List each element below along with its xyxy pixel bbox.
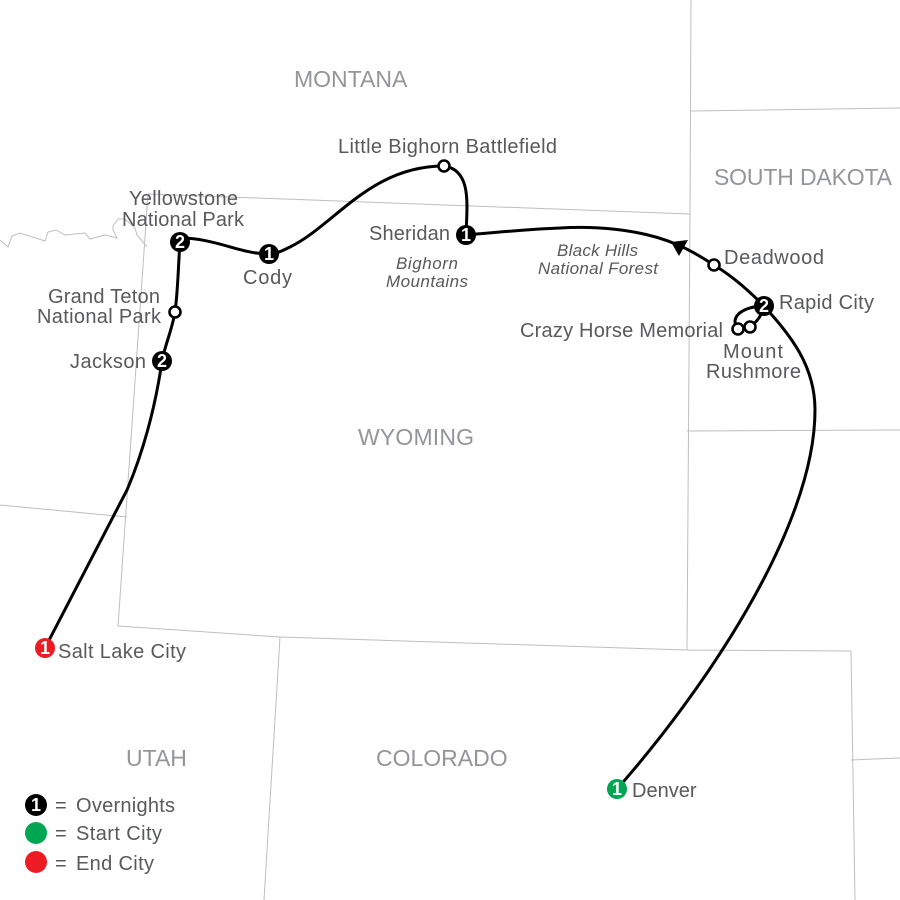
stop: Rapid City: 2 — [759, 296, 769, 316]
state labels: MONTANA — [294, 66, 408, 92]
stop: Mount Rushmore: Mount — [723, 341, 783, 363]
stop: Jackson: 2 — [157, 351, 167, 371]
stop: Grand Teton: Grand Teton — [48, 286, 160, 308]
legend: Overnights — [76, 795, 175, 817]
stop: Salt Lake City: Salt Lake City — [58, 641, 186, 663]
tour route — [45, 166, 815, 789]
stop: Cody — [243, 244, 292, 289]
stop: Yellowstone: National Park — [122, 209, 245, 231]
forest label: National Forest — [538, 259, 659, 278]
state labels: SOUTH DAKOTA — [714, 164, 893, 190]
legend: = — [55, 823, 67, 845]
stop: Mount Rushmore — [706, 322, 801, 383]
direction arrow — [671, 240, 688, 256]
stop: Little Bighorn Battlefield: Little Bighorn Battlefield — [338, 136, 557, 158]
stop: Sheridan: 1 — [461, 225, 471, 245]
mountains label: Mountains — [386, 272, 468, 291]
stop: Denver — [607, 779, 697, 802]
stop: Yellowstone: Yellowstone — [129, 188, 238, 210]
stop: Cody: Cody — [243, 267, 292, 289]
stop: Yellowstone — [122, 188, 245, 252]
stop: Crazy Horse Memorial: Crazy Horse Memorial — [520, 320, 723, 342]
stop: Denver: 1 — [612, 779, 622, 799]
stop: Rapid City: Rapid City — [779, 292, 874, 314]
stop: Deadwood: Deadwood — [724, 247, 824, 269]
forest label: Black Hills — [557, 241, 638, 260]
stop: Sheridan: Sheridan — [369, 223, 450, 245]
legend: = — [55, 853, 67, 875]
legend: End City — [76, 853, 154, 875]
stop: Grand Teton — [37, 286, 180, 328]
state labels: COLORADO — [376, 745, 508, 771]
state labels — [126, 66, 893, 771]
stop: Little Bighorn Battlefield — [338, 136, 557, 172]
stop: Grand Teton: National Park — [37, 306, 162, 328]
state labels: UTAH — [126, 745, 187, 771]
legend: 1 — [31, 795, 41, 815]
stop: Denver: Denver — [632, 780, 697, 802]
legend: Start City — [76, 823, 162, 845]
state labels: WYOMING — [358, 424, 474, 450]
stop: Jackson: Jackson — [70, 351, 146, 373]
mountains label: Bighorn — [396, 254, 458, 273]
stop: Yellowstone: 2 — [175, 232, 185, 252]
legend: = — [55, 795, 67, 817]
stop: Salt Lake City: 1 — [40, 638, 50, 658]
stop: Mount Rushmore: Rushmore — [706, 361, 801, 383]
stop: Cody: 1 — [264, 244, 274, 264]
legend — [25, 794, 175, 875]
